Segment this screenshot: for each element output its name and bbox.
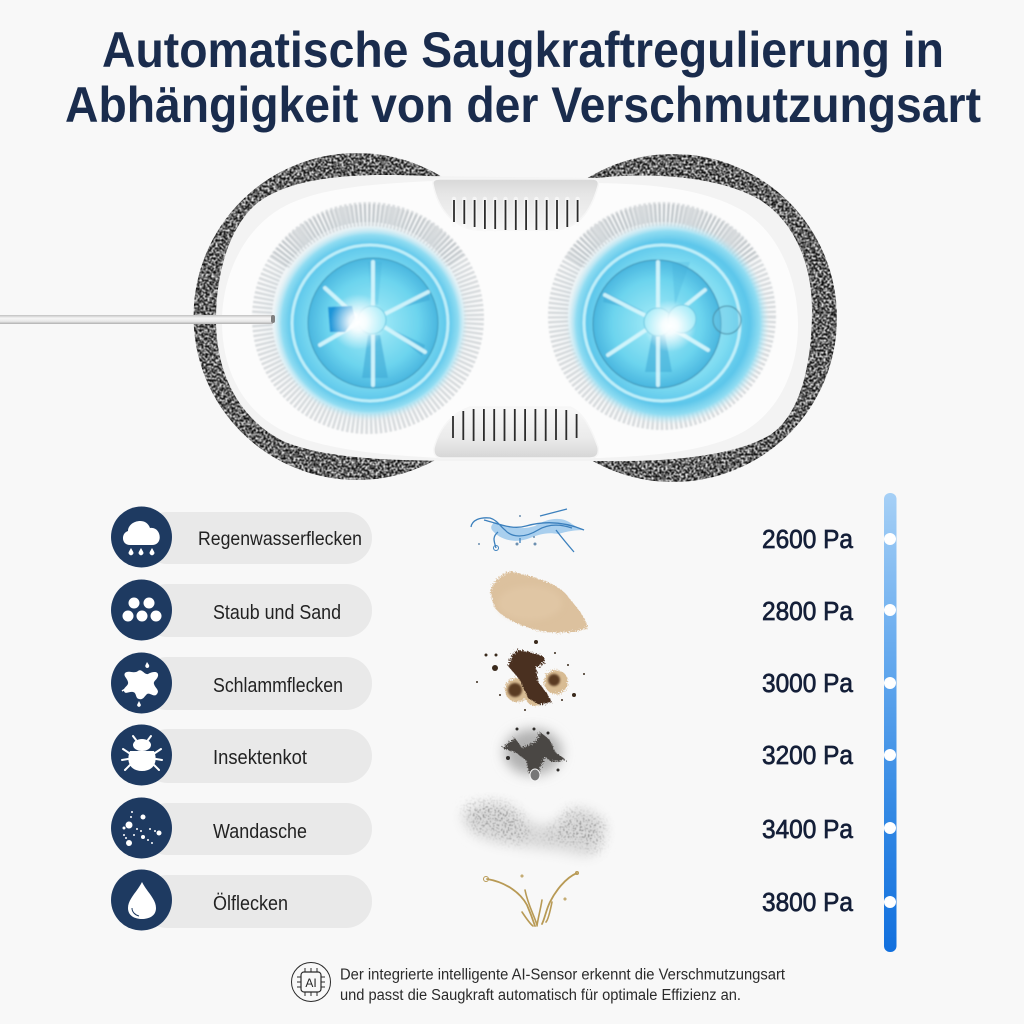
top vent [433,179,598,230]
pressure values: 2600 Pa [762,526,854,554]
footer note: Der integrierte intelligente AI-Sensor erkennt die Verschmutzungsart [340,966,786,984]
pressure values: 3400 Pa [762,816,854,844]
footer note [340,966,786,1004]
bottom vent [434,407,598,458]
sample: water splash [471,509,585,552]
robot body [222,181,798,458]
pressure scale [884,493,896,952]
sample: oil [484,872,578,926]
pill [141,584,372,637]
pointer rod [0,315,275,324]
sample: wall ash [462,802,605,856]
pressure values: 3200 Pa [762,742,854,770]
label: Ölflecken [213,892,288,915]
icon: AI sensor [292,962,330,1002]
row: Schlammflecken [111,652,372,714]
row: Staub und Sand [111,580,372,640]
pressure values: 3800 Pa [762,889,854,917]
row: Ölflecken [111,870,372,930]
row: Insektenkot [111,724,372,786]
icon: rain cloud [111,506,172,568]
title [65,22,981,133]
icon: oil drop [111,870,172,930]
label: Wandasche [213,820,307,843]
icon: mud splat [111,652,172,714]
right mop pad [509,154,837,482]
right fan [544,198,780,434]
rear shell [216,175,812,461]
pill [141,512,372,564]
left mop pad [194,153,520,480]
pill [141,875,372,928]
label: Insektenkot [213,746,307,769]
sensor circle [713,306,741,334]
row: Wandasche [111,798,372,858]
sample: sand [490,572,588,633]
icon: ash particles [111,798,172,858]
icon: beetle [111,724,172,786]
icon: AI sensor: AI [305,976,317,990]
pressure values: 3000 Pa [762,670,854,698]
title: Automatische Saugkraftregulierung in [102,22,944,78]
sample: mud [476,640,585,711]
left fan [250,200,486,436]
robot illustration [0,153,837,482]
pressure values: 2800 Pa [762,598,854,626]
label: Schlammflecken [213,675,343,697]
pill [141,803,372,855]
pill [141,729,372,783]
blue marker [328,306,355,332]
label: Staub und Sand [213,601,341,624]
footer note: und passt die Saugkraft automatisch für optimale Effizienz an. [340,987,741,1004]
label: Regenwasserflecken [198,528,362,550]
row: Regenwasserflecken [111,506,372,568]
sample: soot [502,728,566,781]
pill [141,657,372,710]
pressure values [762,526,854,917]
icon: particles [111,580,172,640]
